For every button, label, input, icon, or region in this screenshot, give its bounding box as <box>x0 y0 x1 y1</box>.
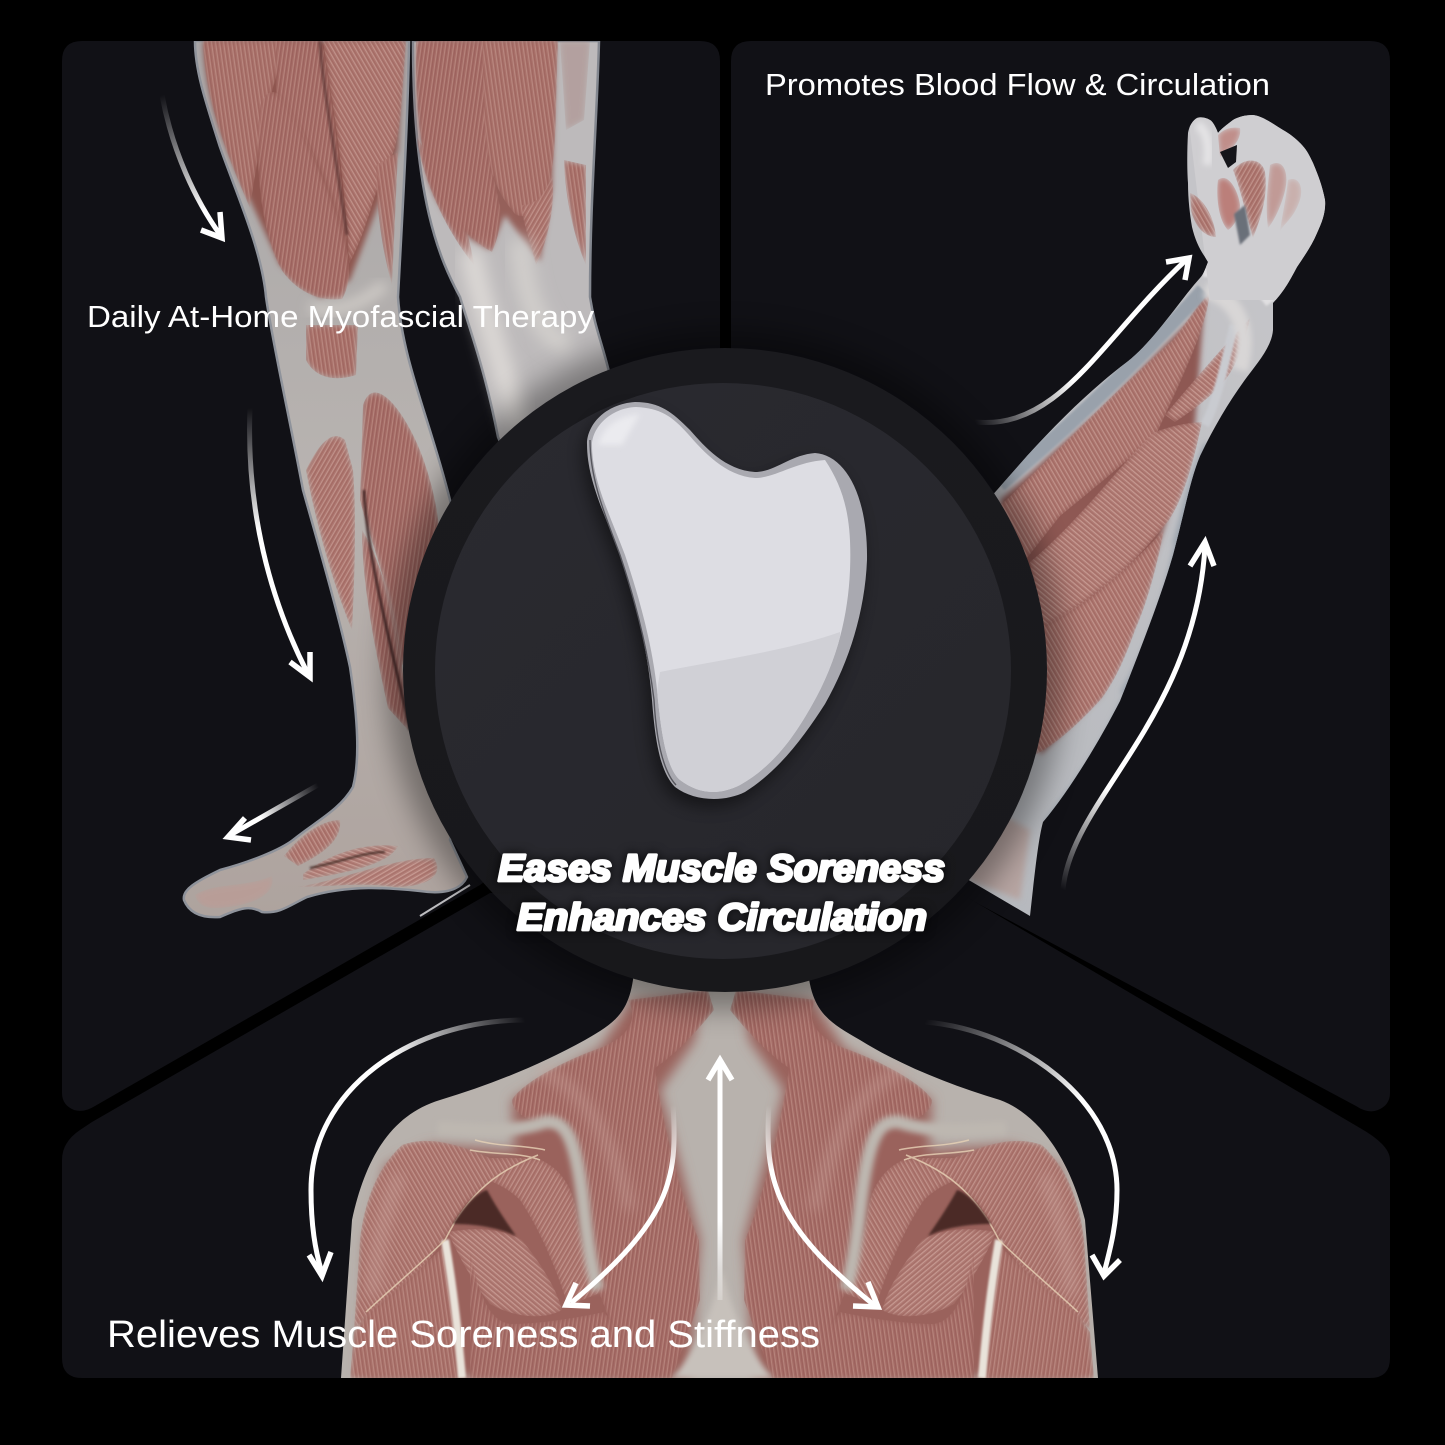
label: blood flow: Promotes Blood Flow & Circulation <box>765 67 1270 102</box>
panel: top-left background <box>62 41 720 1111</box>
heading: eases muscle soreness: Enhances Circulation <box>517 897 927 939</box>
central disc <box>385 330 1065 1010</box>
far leg <box>412 41 610 442</box>
panel: bottom background <box>62 893 1390 1378</box>
illustration: back and shoulder muscles <box>341 978 1098 1378</box>
heading: eases muscle soreness: Eases Muscle Soreness <box>498 848 945 890</box>
arrow: right shoulder <box>925 1022 1120 1276</box>
arrow: thigh <box>162 95 222 238</box>
illustration: arm muscles <box>969 115 1326 916</box>
arrow: shin <box>250 408 310 677</box>
arrow: spine <box>708 1060 732 1300</box>
arrow: left back <box>566 1105 674 1306</box>
label: daily therapy: Daily At-Home Myofascial Therapy <box>87 299 595 334</box>
near leg and foot <box>184 41 480 917</box>
illustration: leg muscles <box>184 41 612 917</box>
arrow: right back <box>768 1105 878 1307</box>
arrow: lower forearm <box>1063 542 1214 890</box>
label: muscle soreness: Relieves Muscle Soreness and Stiffness <box>107 1314 820 1356</box>
heading: eases muscle soreness <box>498 848 945 939</box>
panel: top-right background <box>731 41 1390 1111</box>
arrow: upper forearm <box>975 258 1189 422</box>
arrow: left shoulder <box>309 1020 525 1276</box>
icon: gua sha tool <box>583 402 867 807</box>
arrow: foot <box>228 785 318 840</box>
